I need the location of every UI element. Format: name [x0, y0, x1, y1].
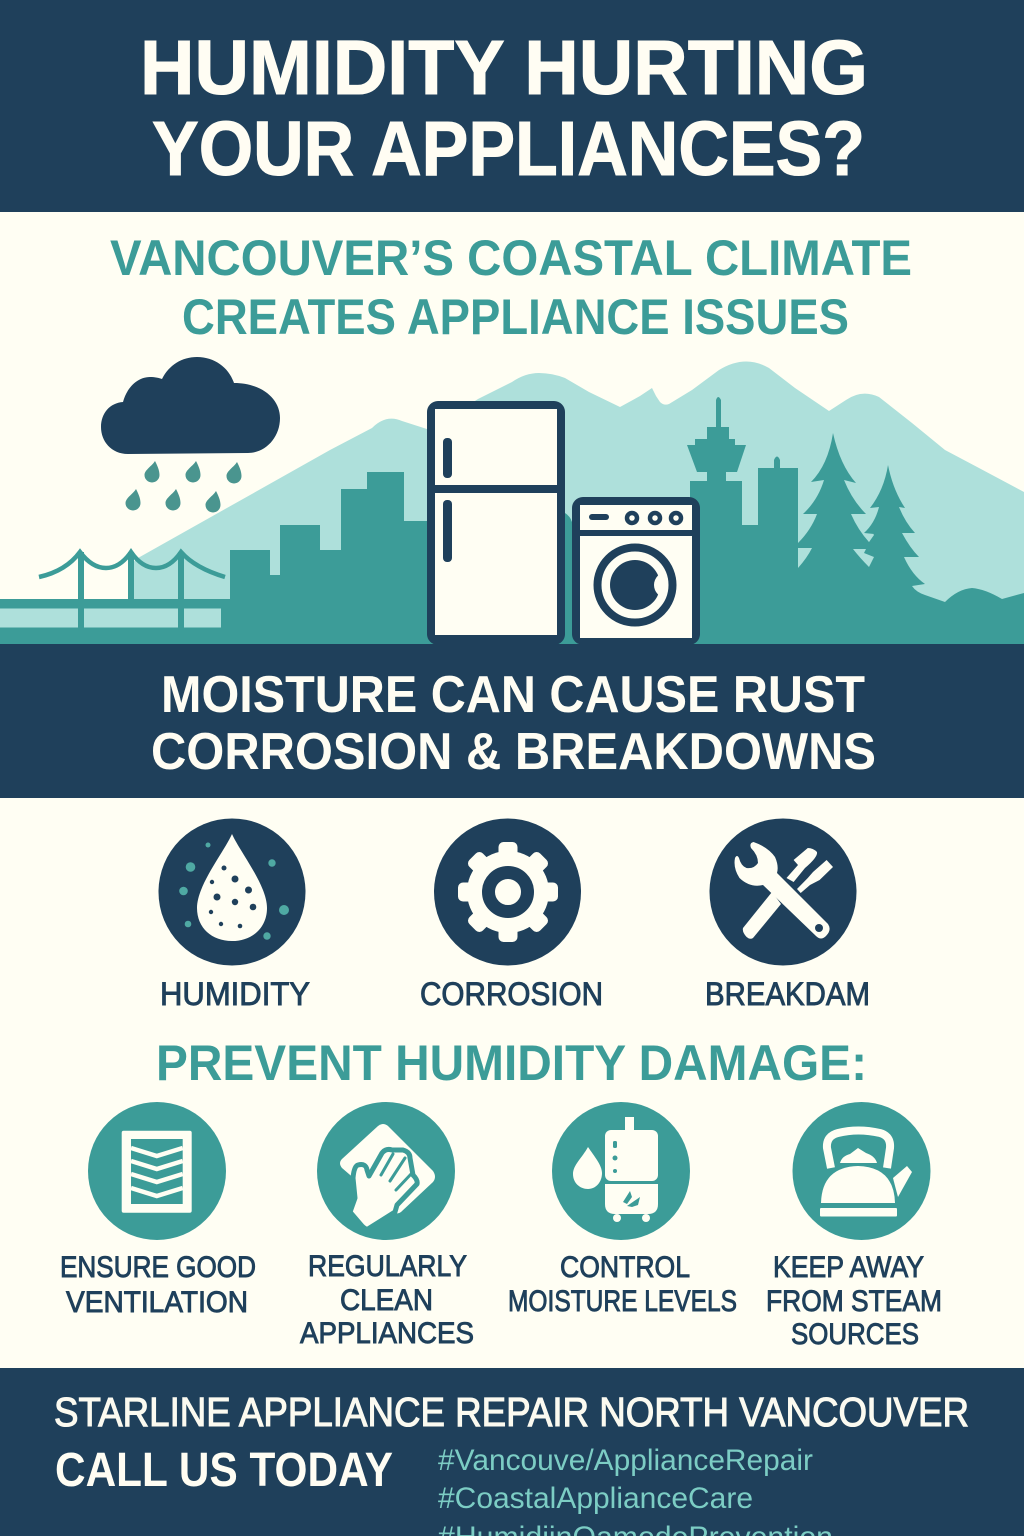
label: ensure good ventilation: ENSURE GOOD [60, 1251, 256, 1284]
call to action: CALL US TODAY [55, 1444, 393, 1497]
city and bridge deck silhouette [0, 472, 440, 644]
icon: refrigerator [427, 401, 565, 645]
title banner: YOUR APPLIANCES? [152, 106, 865, 192]
title banner [0, 0, 1024, 212]
icon: dehumidifier [552, 1102, 690, 1240]
label: control moisture levels: CONTROL [560, 1251, 690, 1284]
label: keep away from steam sources: FROM STEAM [766, 1285, 942, 1318]
label: regularly clean appliances: APPLIANCES [300, 1317, 474, 1350]
footer panel [0, 1368, 1024, 1536]
label: keep away from steam sources: KEEP AWAY [773, 1251, 924, 1284]
banner: moisture warning [0, 644, 1024, 798]
harbour tower, buildings, trees silhouette [687, 397, 1024, 644]
label: humidity: HUMIDITY [160, 976, 310, 1012]
title banner: HUMIDITY HURTING [140, 25, 868, 111]
icon: breakdown tools [710, 818, 856, 966]
hashtags [438, 1444, 833, 1536]
bridge [0, 552, 225, 628]
hashtags: #Vancouve/ApplianceRepair [438, 1444, 813, 1477]
illustration: Vancouver skyline with appliances [0, 357, 1024, 645]
label: ensure good ventilation [60, 1251, 256, 1319]
icon: washing machine [572, 497, 700, 645]
label: regularly clean appliances: REGULARLY [308, 1250, 467, 1283]
teal strip between appliances [555, 513, 578, 644]
subheading: coastal climate: CREATES APPLIANCE ISSUES [182, 289, 849, 345]
label: control moisture levels [508, 1251, 737, 1318]
label: corrosion: CORROSION [420, 976, 603, 1012]
icon: ventilation [88, 1102, 226, 1240]
label: regularly clean appliances [300, 1250, 474, 1350]
label: keep away from steam sources: SOURCES [791, 1318, 919, 1351]
mountains [130, 361, 1024, 644]
label: keep away from steam sources [766, 1251, 942, 1351]
icon: humidity [158, 818, 306, 966]
icon: steaming kettle [792, 1102, 930, 1240]
banner: moisture warning: MOISTURE CAN CAUSE RUST [161, 666, 865, 724]
label: control moisture levels: MOISTURE LEVELS [508, 1285, 737, 1318]
label: breakdown: BREAKDAM [705, 976, 870, 1012]
subheading: coastal climate: VANCOUVER’S COASTAL CLIMATE [110, 230, 912, 286]
icon: corrosion gear [434, 818, 581, 966]
heading: prevent humidity damage: PREVENT HUMIDITY DAMAGE: [156, 1035, 867, 1091]
label: ensure good ventilation: VENTILATION [66, 1286, 248, 1319]
subheading: coastal climate [110, 230, 912, 345]
icon: rain cloud [101, 357, 280, 512]
tree notches [798, 535, 874, 568]
icon: hand wiping with cloth [317, 1102, 455, 1240]
hashtags: #CoastalApplianceCare [438, 1482, 753, 1515]
banner: moisture warning: CORROSION & BREAKDOWNS [151, 723, 876, 781]
label: regularly clean appliances: CLEAN [340, 1284, 433, 1317]
